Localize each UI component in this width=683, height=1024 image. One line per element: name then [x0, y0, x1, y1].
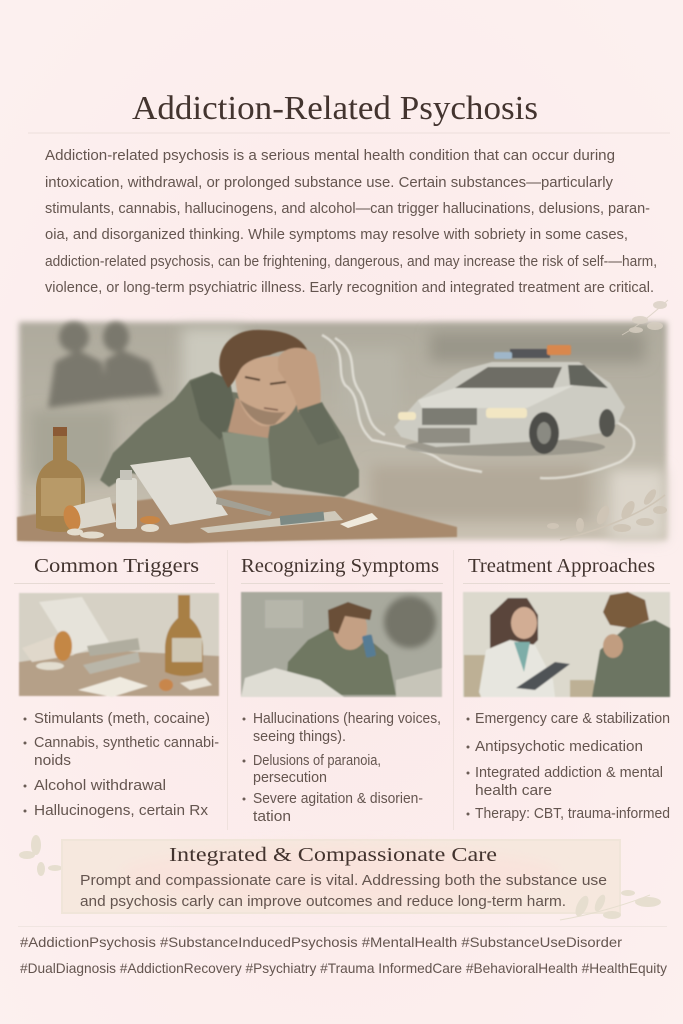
intro paragraph: oia, and disorganized thinking. While symptoms may resolve with sobriety in some cases,	[45, 226, 628, 243]
heading: treatment approaches: Treatment Approaches	[468, 555, 655, 577]
man with head in hand	[100, 330, 359, 497]
callout: integrated and compassionate care: and psychosis carly can improve outcomes and reduce long-term harm.	[80, 893, 566, 910]
intro paragraph: intoxication, withdrawal, or prolonged substance use. Certain substances—particularly	[45, 174, 613, 191]
leaf sprig: top right of illustration	[622, 300, 668, 335]
list: symptoms: Delusions of paranoia,	[253, 753, 381, 769]
column dividers	[227, 550, 454, 830]
list: triggers: Hallucinogens, certain Rx	[34, 803, 209, 819]
list: symptoms	[242, 711, 441, 825]
list: triggers: Stimulants (meth, cocaine)	[34, 711, 210, 727]
list: symptoms: tation	[253, 809, 291, 825]
intro paragraph	[45, 147, 657, 296]
callout: integrated and compassionate care: Prompt and compassionate care is vital. Addressing both the substance use	[80, 872, 607, 889]
panel: common triggers	[14, 555, 219, 819]
road and haze	[30, 328, 665, 540]
shadow figures	[48, 322, 162, 408]
list: treatments: health care	[475, 783, 552, 799]
image: scattered substances	[19, 593, 219, 697]
heading: common triggers: Common Triggers	[34, 555, 199, 577]
list: treatments: Integrated addiction & mental	[475, 765, 663, 781]
leaf sprig: bottom right of illustration	[547, 487, 667, 540]
police car	[394, 345, 625, 456]
list: symptoms: Hallucinations (hearing voices,	[253, 711, 441, 727]
list: treatments: Emergency care & stabilization	[475, 711, 670, 727]
hashtags: #DualDiagnosis #AddictionRecovery #Psychiatry #Trauma InformedCare #BehavioralHealth #HealthEquity	[20, 960, 667, 976]
list: treatments: Therapy: CBT, trauma-informed	[475, 806, 670, 822]
list: triggers: Cannabis, synthetic cannabi-	[34, 735, 219, 751]
list: treatments	[466, 711, 670, 822]
intro paragraph: violence, or long-term psychiatric illness. Early recognition and integrated treatment are critical.	[45, 279, 654, 296]
scene background wash	[19, 322, 667, 540]
list: symptoms: seeing things).	[253, 729, 346, 745]
callout: integrated and compassionate care	[62, 840, 620, 913]
list: treatments: Antipsychotic medication	[475, 739, 643, 755]
hashtags: #AddictionPsychosis #SubstanceInducedPsychosis #MentalHealth #SubstanceUseDisorder	[20, 934, 622, 950]
rule above hashtags	[18, 926, 667, 927]
image: man on phone in bed	[241, 592, 442, 697]
list: triggers: noids	[34, 753, 71, 769]
list: symptoms: persecution	[253, 770, 327, 786]
list: triggers: Alcohol withdrawal	[34, 778, 166, 794]
table	[17, 490, 457, 543]
image: clinician with patient	[463, 592, 670, 697]
panel: treatment approaches	[463, 555, 670, 822]
smoke wisps	[322, 335, 634, 478]
leaf sprig: right of banner	[560, 890, 661, 920]
heading: recognizing symptoms: Recognizing Symptoms	[241, 555, 439, 577]
intro paragraph: stimulants, cannabis, hallucinogens, and alcohol—can trigger hallucinations, delusions, paran-	[45, 200, 650, 217]
intro paragraph: Addiction-related psychosis is a serious mental health condition that can occur during	[45, 147, 615, 164]
list: triggers	[24, 711, 219, 819]
main illustration: man in distress with substances and police car	[17, 322, 667, 543]
list: symptoms: Severe agitation & disorien-	[253, 791, 423, 807]
hashtags	[20, 934, 667, 976]
bottles, pills, bag and syringe on the table	[36, 427, 378, 538]
callout: integrated and compassionate care: Integrated & Compassionate Care	[169, 844, 497, 866]
title: Addiction-Related Psychosis	[132, 90, 538, 127]
leaf sprig: left of banner	[19, 835, 62, 876]
panel: recognizing symptoms	[241, 555, 443, 825]
